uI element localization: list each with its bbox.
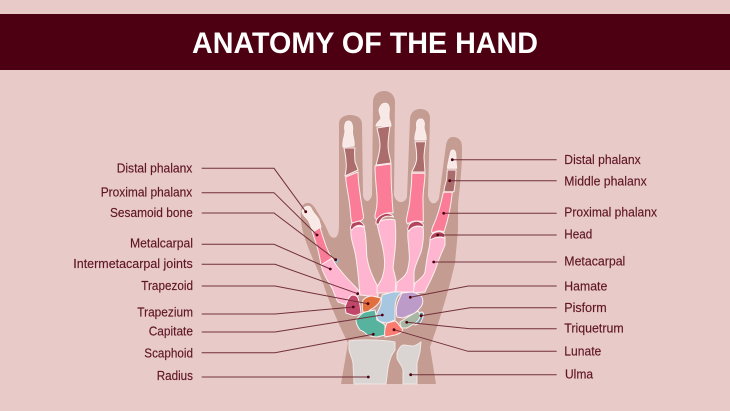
capitate	[376, 292, 402, 323]
label: ulma: Ulma	[565, 368, 593, 382]
label: trapezoid	[141, 279, 369, 305]
label: sesamoid bone: Sesamoid bone	[110, 206, 193, 220]
label: head: Head	[564, 227, 592, 241]
little finger bones	[413, 150, 457, 293]
right labels	[393, 153, 658, 382]
hand illustration	[301, 91, 462, 384]
label: metacarpal: Metacarpal	[564, 254, 625, 268]
carpal bones	[345, 292, 424, 337]
label: intermetacarpal joints	[73, 257, 359, 295]
label: hamate: Hamate	[564, 279, 607, 293]
triquetrum	[400, 311, 420, 328]
label: triquetrum	[405, 321, 624, 335]
label: trapezoid: Trapezoid	[141, 279, 193, 293]
left labels	[73, 162, 384, 383]
label: proximal phalanx right: Proximal phalanx	[564, 205, 658, 219]
label: proximal phalanx	[101, 186, 318, 236]
trapezium	[345, 295, 361, 315]
radius bone	[349, 340, 395, 384]
label: distal phalanx: Distal phalanx	[117, 162, 193, 176]
trapezoid	[362, 296, 381, 312]
ring finger bones	[396, 119, 426, 292]
label: radius: Radius	[157, 369, 193, 383]
label: capitate: Capitate	[149, 324, 193, 338]
sesamoid bone	[335, 259, 339, 263]
hamate	[396, 292, 423, 318]
label: proximal phalanx: Proximal phalanx	[101, 186, 193, 200]
title: ANATOMY OF THE HAND	[192, 27, 538, 60]
label: metalcarpal: Metalcarpal	[130, 237, 193, 251]
hand silhouette	[301, 91, 462, 384]
label: lunate	[393, 328, 601, 359]
label: distal phalanx right: Distal phalanx	[564, 153, 641, 167]
title banner	[0, 14, 730, 70]
scaphoid	[356, 310, 385, 337]
label: hamate	[409, 279, 607, 299]
label: middle phalanx: Middle phalanx	[564, 175, 647, 189]
middle finger bones	[375, 103, 396, 293]
label: capitate	[149, 314, 384, 338]
label: scaphoid	[144, 333, 375, 360]
ulna bone	[397, 342, 421, 384]
lunate	[385, 321, 403, 337]
label: lunate: Lunate	[564, 345, 601, 359]
label: metalcarpal	[130, 237, 332, 270]
label: distal phalanx	[117, 162, 307, 213]
index finger bones	[343, 121, 378, 297]
label: intermetacarpal joints: Intermetacarpal joints	[73, 257, 193, 271]
label: scaphoid: Scaphoid	[144, 346, 193, 360]
label: pisform: Pisform	[564, 301, 607, 315]
label: triquetrum: Triquetrum	[564, 321, 624, 335]
label: pisform	[420, 301, 607, 317]
pisiform	[413, 312, 424, 325]
thumb bones	[302, 206, 360, 305]
label: trapezium	[137, 306, 355, 320]
label: trapezium: Trapezium	[137, 306, 193, 320]
label: sesamoid bone	[110, 206, 337, 261]
